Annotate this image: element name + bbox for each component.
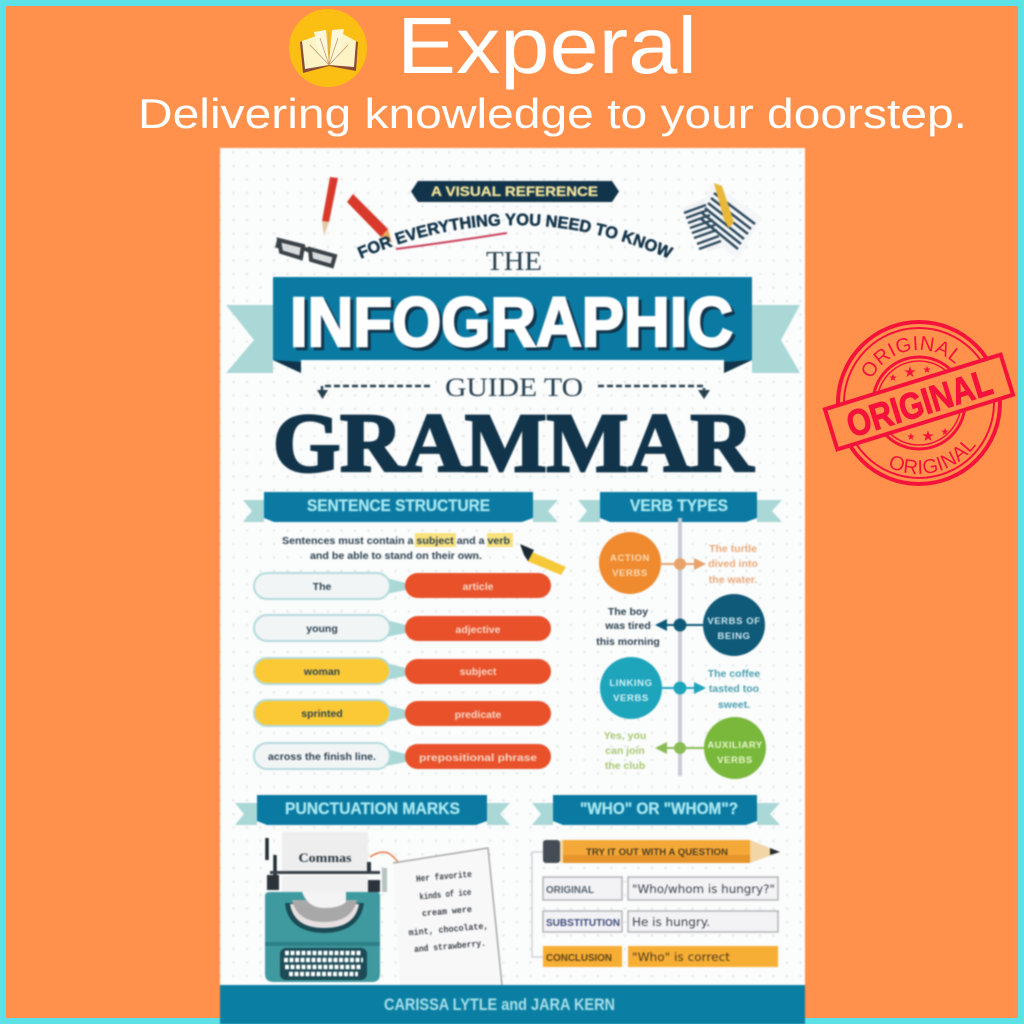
verb: being: this morning bbox=[596, 636, 660, 648]
heading: verb types: VERB TYPES bbox=[630, 496, 728, 515]
icon: red pencil upright bbox=[322, 177, 338, 236]
icon: pencil: TRY IT OUT WITH A QUESTION bbox=[586, 847, 728, 858]
verb: being bbox=[596, 594, 765, 656]
heading: sentence structure bbox=[243, 492, 558, 522]
verb: linking: VERBS bbox=[613, 693, 649, 704]
main title banner: INFOGRAPHIC bbox=[293, 286, 736, 364]
row: across the finish line / prepositional phrase: across the finish line. bbox=[268, 751, 376, 763]
badge: a visual reference: A VISUAL REFERENCE bbox=[431, 183, 598, 199]
icon: red pencil diagonal bbox=[347, 194, 392, 243]
row: across the finish line / prepositional phrase bbox=[254, 743, 551, 769]
callout: example sheet: and strawberry. bbox=[414, 939, 486, 955]
title: the: THE bbox=[486, 246, 542, 276]
heading: who or whom: "WHO" OR "WHOM"? bbox=[580, 799, 738, 818]
badge: a visual reference bbox=[411, 181, 619, 202]
stamp stars bbox=[889, 364, 950, 445]
verb: action bbox=[599, 532, 758, 594]
verb: action: the water. bbox=[709, 574, 757, 586]
icon: glasses bbox=[277, 240, 335, 266]
row: sprinted / predicate: predicate bbox=[455, 709, 502, 721]
heading: punctuation marks bbox=[235, 795, 510, 825]
brand tagline: Delivering knowledge to your doorstep. bbox=[138, 90, 967, 137]
icon: highlighter bbox=[520, 544, 566, 575]
verb: linking: LINKING bbox=[609, 678, 653, 689]
verb: auxiliary: VERBS bbox=[717, 755, 753, 766]
footer: authors: CARISSA LYTLE and JARA KERN bbox=[384, 995, 615, 1014]
icon: papers and yellow pencil bbox=[682, 183, 762, 260]
row: across the finish line / prepositional phrase: prepositional phrase bbox=[419, 752, 537, 764]
timeline axis bbox=[678, 518, 682, 776]
stamp stars: ★ bbox=[923, 365, 932, 376]
row: original: "Who/whom is hungry?" bbox=[632, 882, 775, 896]
row: conclusion: CONCLUSION bbox=[546, 953, 612, 964]
icon: typewriter bbox=[265, 832, 387, 982]
stamp stars: ★ bbox=[941, 427, 950, 438]
icon: open book logo bbox=[289, 9, 367, 87]
main title banner: INFOGRAPHIC bbox=[290, 283, 733, 361]
verb: action: dived into bbox=[708, 558, 758, 570]
row: young / adjective: young bbox=[306, 623, 338, 635]
stamp stars: ★ bbox=[907, 432, 916, 443]
verb: auxiliary: the club bbox=[605, 760, 645, 772]
row: woman / subject bbox=[254, 658, 551, 684]
row: the / article: article bbox=[463, 581, 494, 593]
callout: example sheet bbox=[393, 848, 502, 985]
verb: action: VERBS bbox=[612, 568, 648, 579]
row: conclusion bbox=[543, 946, 778, 967]
verb: being: was tired bbox=[604, 620, 651, 632]
callout: example sheet: kinds of ice bbox=[419, 888, 472, 902]
verb: being: VERBS OF bbox=[707, 616, 761, 627]
stamp stars: ★ bbox=[921, 428, 935, 445]
panel: who or whom bbox=[532, 795, 780, 967]
heading: punctuation marks: PUNCTUATION MARKS bbox=[285, 799, 460, 818]
connector bracket bbox=[532, 852, 543, 957]
heading: who or whom bbox=[532, 795, 780, 825]
stamp stars: ★ bbox=[889, 373, 898, 384]
panel: verb types bbox=[578, 492, 782, 779]
row: woman / subject: subject bbox=[460, 666, 497, 678]
verb: being: The boy bbox=[608, 606, 648, 618]
stamp stars: ★ bbox=[903, 364, 917, 381]
panel: punctuation marks bbox=[235, 795, 510, 985]
footer: authors bbox=[220, 985, 805, 1024]
stamp: original bbox=[822, 320, 1016, 486]
arrow: dashed right bbox=[598, 386, 710, 399]
row: young / adjective bbox=[254, 615, 551, 641]
heading: verb types bbox=[578, 492, 782, 522]
book cover bbox=[218, 147, 806, 1024]
arrow: squiggle bbox=[370, 852, 407, 866]
verb: action: The turtle bbox=[709, 543, 757, 555]
panel: sentence structure bbox=[243, 492, 566, 769]
verb: linking: tasted too bbox=[709, 683, 759, 695]
callout: example sheet: Her favorite bbox=[416, 870, 472, 885]
row: original bbox=[543, 877, 778, 900]
brand header bbox=[138, 1, 967, 137]
title: guide to: GUIDE TO bbox=[445, 373, 583, 402]
row: sprinted / predicate: sprinted bbox=[301, 708, 343, 720]
stamp banner: ORIGINAL bbox=[842, 362, 997, 445]
row: substitution: He is hungry. bbox=[632, 915, 710, 929]
icon: pencil bbox=[543, 840, 780, 863]
arrow: dashed left bbox=[317, 386, 430, 399]
callout: example sheet: mint, chocolate, bbox=[408, 921, 489, 938]
row: young / adjective: adjective bbox=[456, 624, 501, 636]
brand name: Experal bbox=[397, 1, 697, 90]
arched subtitle: FOR EVERYTHING YOU NEED TO KNOW bbox=[356, 212, 675, 260]
verb: auxiliary: can join bbox=[605, 745, 645, 757]
title: grammar: GRAMMAR bbox=[273, 397, 754, 490]
row: the / article bbox=[254, 573, 551, 599]
callout: example sheet: cream were bbox=[422, 905, 472, 919]
row: woman / subject: woman bbox=[303, 666, 340, 678]
verb: auxiliary bbox=[604, 717, 766, 779]
heading: sentence structure: SENTENCE STRUCTURE bbox=[307, 496, 490, 515]
row: sprinted / predicate bbox=[254, 700, 551, 726]
row: conclusion: "Who" is correct bbox=[632, 950, 731, 964]
main title banner bbox=[226, 277, 800, 373]
verb: auxiliary: AUXILIARY bbox=[707, 740, 763, 751]
verb: auxiliary: Yes, you bbox=[604, 730, 646, 742]
row: substitution bbox=[543, 911, 778, 932]
verb: linking bbox=[600, 657, 760, 719]
row: the / article: The bbox=[313, 581, 331, 593]
verb: linking: sweet. bbox=[718, 699, 750, 711]
verb: linking: The coffee bbox=[708, 668, 760, 680]
stamp ring text top: ORIGINAL bbox=[862, 336, 958, 376]
typewriter page label: Commas bbox=[298, 851, 352, 865]
row: original: ORIGINAL bbox=[546, 885, 594, 896]
rule text with highlights: and be able to stand on their own. bbox=[310, 550, 482, 562]
row: substitution: SUBSTITUTION bbox=[546, 918, 620, 929]
rule text with highlights: Sentences must contain a subject and a verb bbox=[282, 535, 510, 547]
verb: action: ACTION bbox=[610, 553, 650, 564]
rule text with highlights bbox=[282, 533, 513, 562]
stamp ring text bottom: ORIGINAL bbox=[890, 442, 976, 474]
verb: being: BEING bbox=[717, 631, 751, 642]
